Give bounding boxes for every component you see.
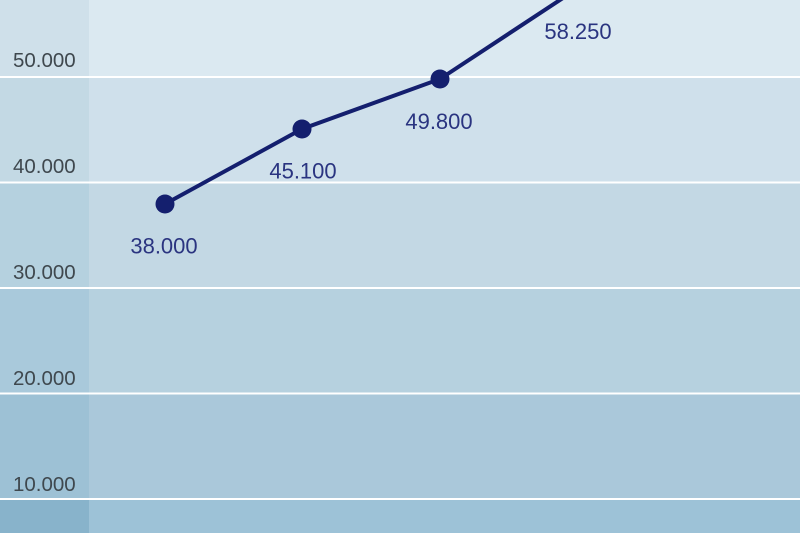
data value labels: 58.250 bbox=[544, 19, 612, 44]
data value labels: 45.100 bbox=[269, 158, 337, 184]
data value labels: 38.000 bbox=[130, 234, 198, 258]
data value labels: 49.800 bbox=[405, 109, 473, 134]
y-axis labels: 20.000 bbox=[13, 367, 76, 390]
y-axis labels bbox=[13, 49, 76, 496]
y-axis labels: 10.000 bbox=[13, 473, 76, 496]
y-axis labels: 40.000 bbox=[13, 155, 76, 178]
y-axis column bbox=[0, 0, 89, 533]
y-axis labels: 50.000 bbox=[13, 49, 76, 72]
data points bbox=[156, 70, 450, 214]
data value labels bbox=[130, 19, 612, 258]
data line bbox=[165, 0, 566, 204]
y-axis labels: 30.000 bbox=[13, 261, 76, 284]
